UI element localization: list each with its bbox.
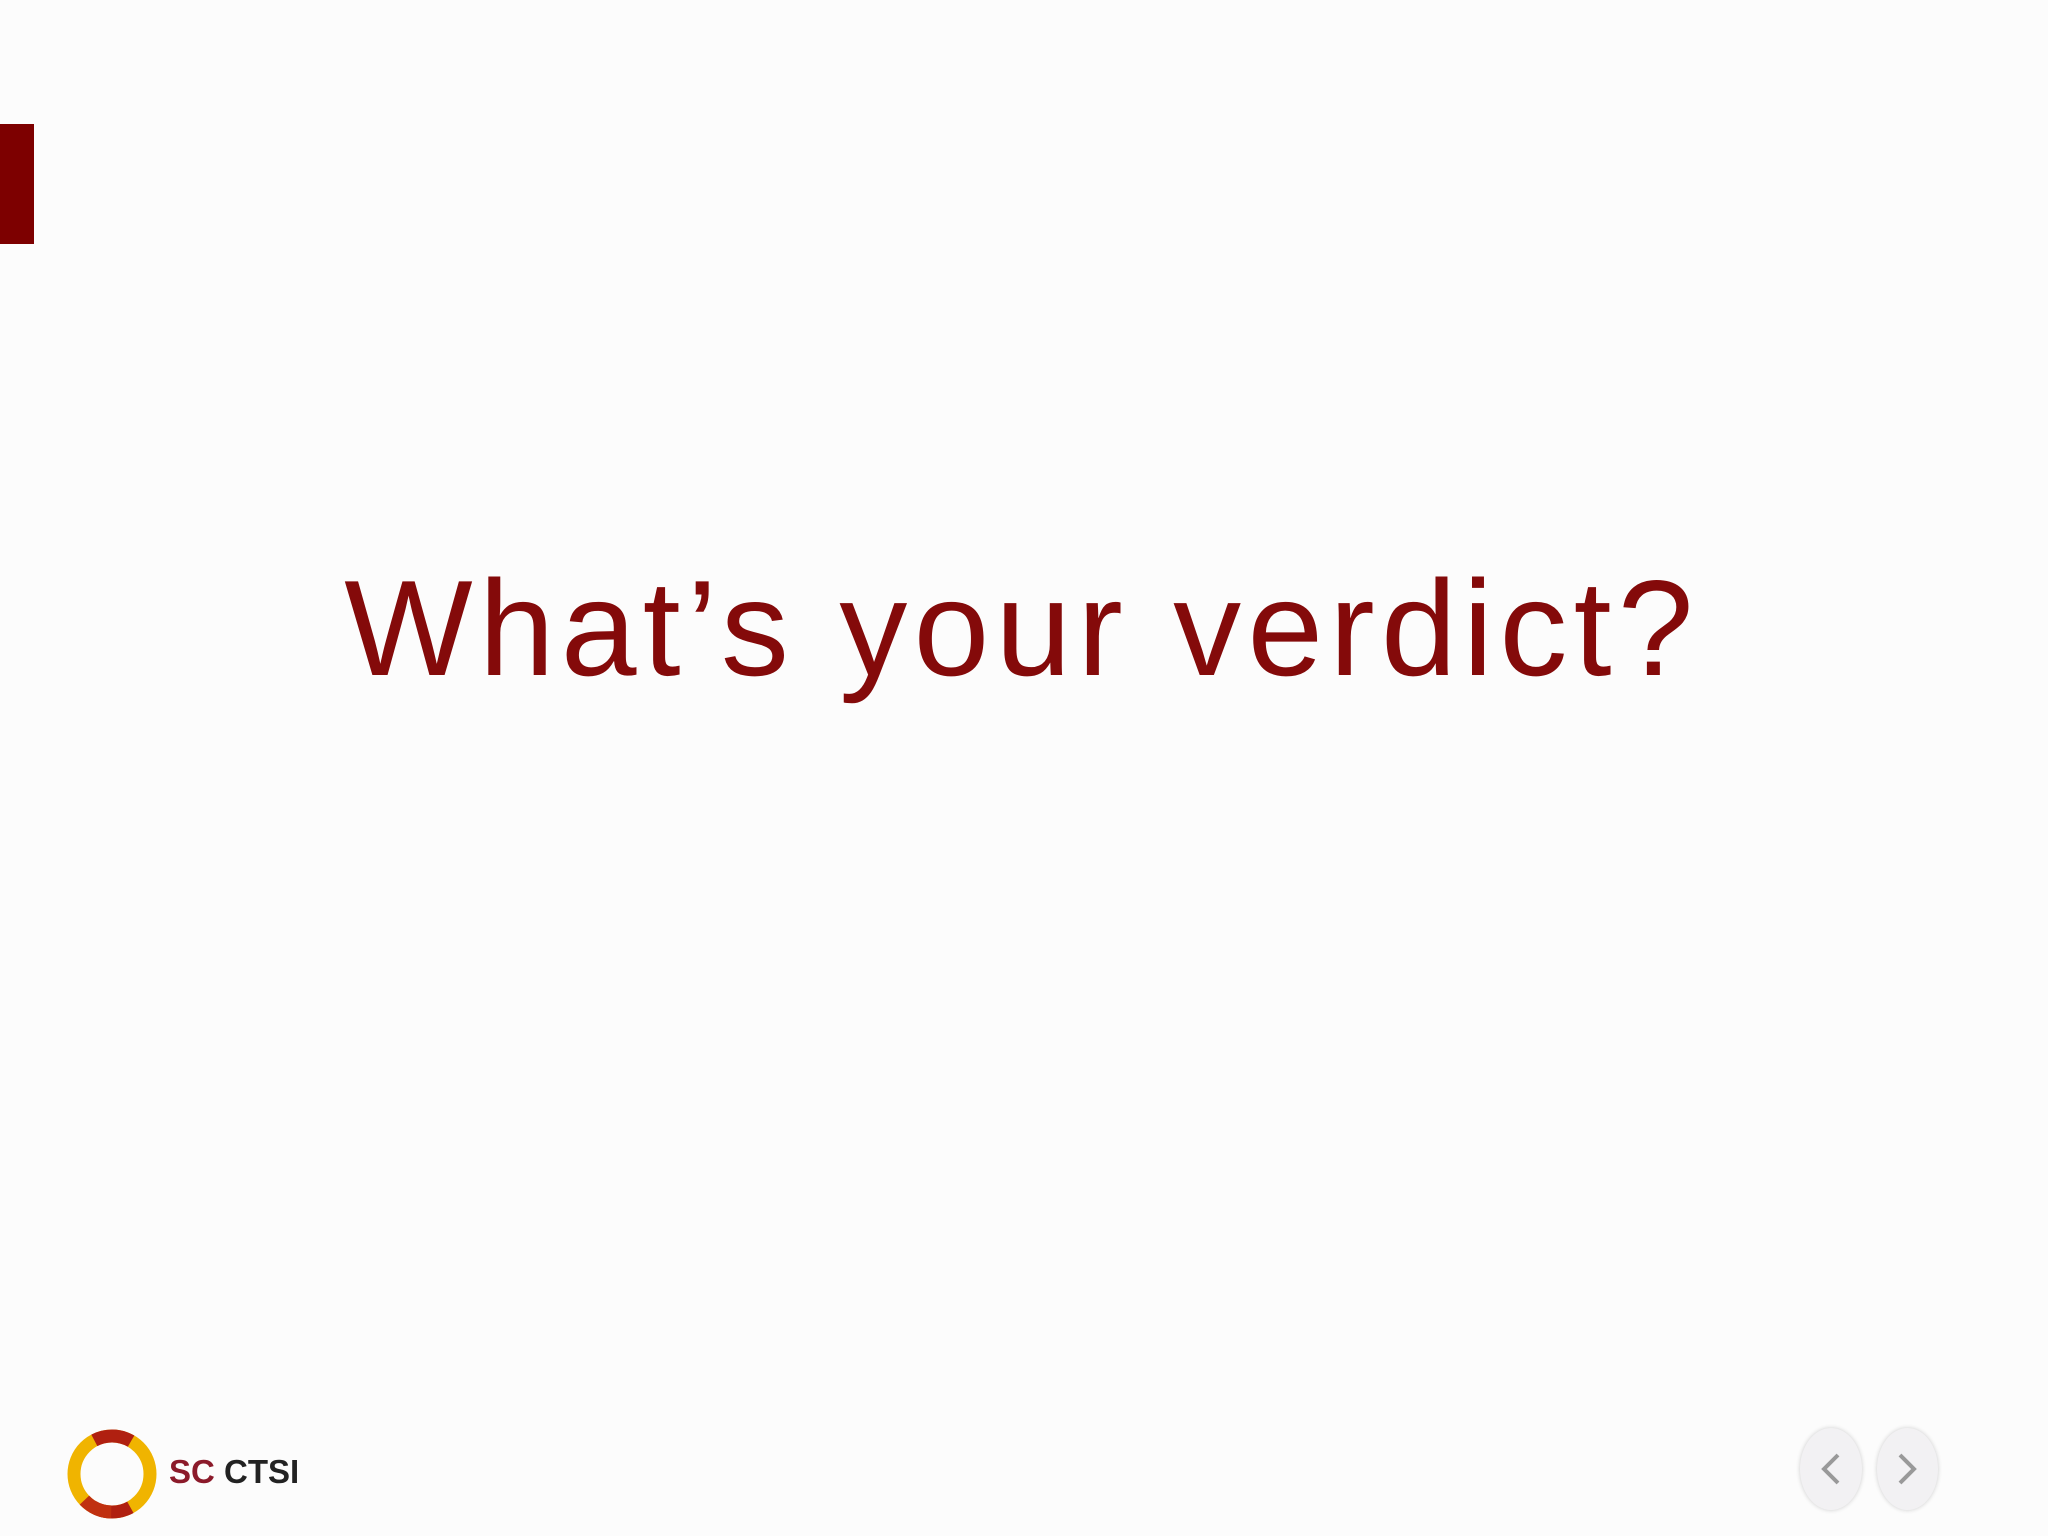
button: previous (1800, 1428, 1862, 1510)
logo: SC CTSI (68, 1430, 299, 1518)
button: next (1877, 1428, 1938, 1510)
accent bar (0, 124, 34, 244)
icon: ring (68, 1430, 156, 1518)
title: What’s your verdict? (344, 552, 1700, 704)
nav buttons (1798, 1426, 1940, 1512)
logo text: SC CTSI (169, 1453, 299, 1490)
